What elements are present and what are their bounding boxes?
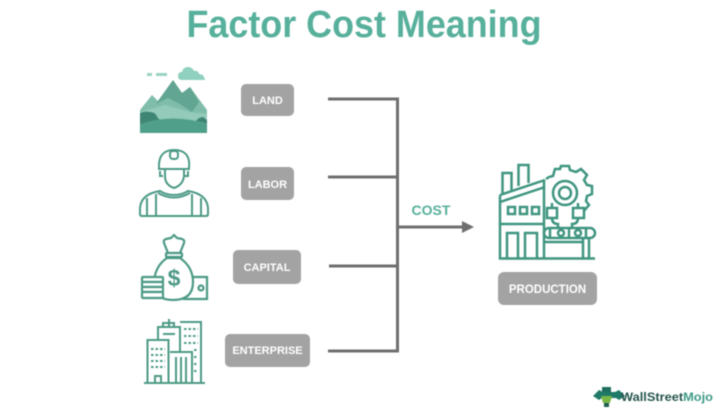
arrow to production — [398, 221, 474, 233]
label: production — [498, 272, 597, 305]
cost label: COST — [412, 202, 451, 218]
logo: WallStreetMojo — [593, 387, 713, 407]
bracket connector lines — [328, 99, 398, 351]
label: capital — [233, 250, 301, 284]
logo: WallStreetMojo: WallStreet Mojo — [621, 390, 713, 404]
icon: factory with gear — [500, 165, 595, 258]
icon: money bag with coins and banknote: $ — [168, 265, 181, 291]
icon: mountain landscape — [140, 67, 207, 133]
icon: city buildings — [144, 319, 205, 383]
title: Factor Cost Meaning — [186, 4, 542, 46]
label: land — [241, 84, 294, 116]
label: enterprise — [225, 334, 310, 367]
label: labor — [241, 167, 294, 200]
icon: money bag with coins and banknote — [142, 235, 207, 300]
label: capital: CAPITAL — [244, 262, 291, 274]
label: enterprise: ENTERPRISE — [232, 345, 303, 357]
icon: worker with helmet — [140, 150, 208, 216]
label: production: PRODUCTION — [509, 284, 586, 296]
label: labor: LABOR — [248, 179, 287, 191]
label: land: LAND — [252, 95, 283, 107]
